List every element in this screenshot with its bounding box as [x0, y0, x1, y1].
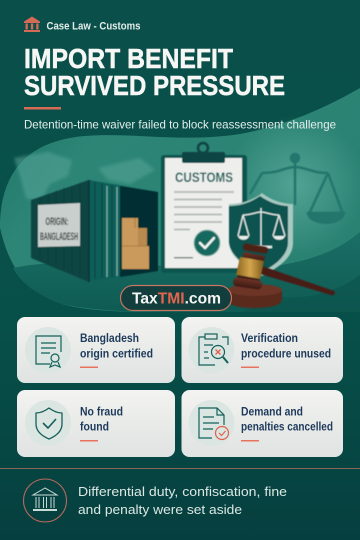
panel: Bangladesh origin certified: Bangladesh: [80, 331, 139, 345]
icon: courthouse: [24, 16, 40, 32]
hero illustration backdrop: [0, 88, 360, 312]
panel: Verification procedure unused: [182, 317, 343, 383]
footer conclusion: [24, 479, 287, 522]
header: case law label: [24, 16, 140, 32]
panel: Verification procedure unused: procedure unused: [241, 346, 331, 360]
title: [24, 43, 285, 101]
panel: No fraud found: found: [80, 420, 109, 434]
accent rule: [24, 107, 61, 110]
world map dots: [14, 152, 155, 202]
icon: shield check: [36, 408, 62, 439]
icon: clipboard and magnifier: [199, 334, 228, 365]
footer conclusion: and penalty were set aside: [78, 502, 242, 517]
illustration: shield with scales: [229, 193, 293, 276]
origin placard: ORIGIN:: [46, 216, 68, 228]
brand badge: TaxTMI.com: [132, 290, 221, 308]
origin placard: BANGLADESH: [40, 231, 78, 243]
illustration: gavel: [228, 243, 335, 308]
illustration: shipping container: [31, 180, 158, 282]
title: IMPORT BENEFIT: [24, 43, 233, 74]
cargo boxes: [122, 218, 149, 269]
icon: courthouse outline: [33, 488, 57, 510]
brand badge: [120, 286, 232, 310]
title: SURVIVED PRESSURE: [24, 70, 285, 101]
icon: document with check: [199, 408, 228, 440]
panel: Demand and penalties cancelled: Demand and: [241, 405, 303, 419]
illustration: customs clipboard: [161, 143, 247, 273]
panel: No fraud found: [17, 390, 175, 457]
origin placard: [38, 203, 80, 247]
panel: Verification procedure unused: Verification: [241, 331, 298, 345]
panel: Demand and penalties cancelled: penalties cancelled: [241, 420, 333, 434]
panel: Demand and penalties cancelled: [182, 390, 343, 457]
customs heading: CUSTOMS: [175, 170, 233, 185]
icon: approval check: [194, 230, 220, 256]
panel: Bangladesh origin certified: [17, 317, 175, 383]
panel: Bangladesh origin certified: origin certified: [80, 346, 153, 360]
subtitle: Detention-time waiver failed to block reassessment challenge: [24, 118, 336, 132]
panel: No fraud found: No fraud: [80, 405, 123, 419]
footer conclusion: Differential duty, confiscation, fine: [78, 484, 287, 499]
icon: certificate: [36, 336, 61, 367]
faint scales of justice: [250, 154, 344, 223]
section label: Case Law - Customs: [46, 20, 140, 32]
